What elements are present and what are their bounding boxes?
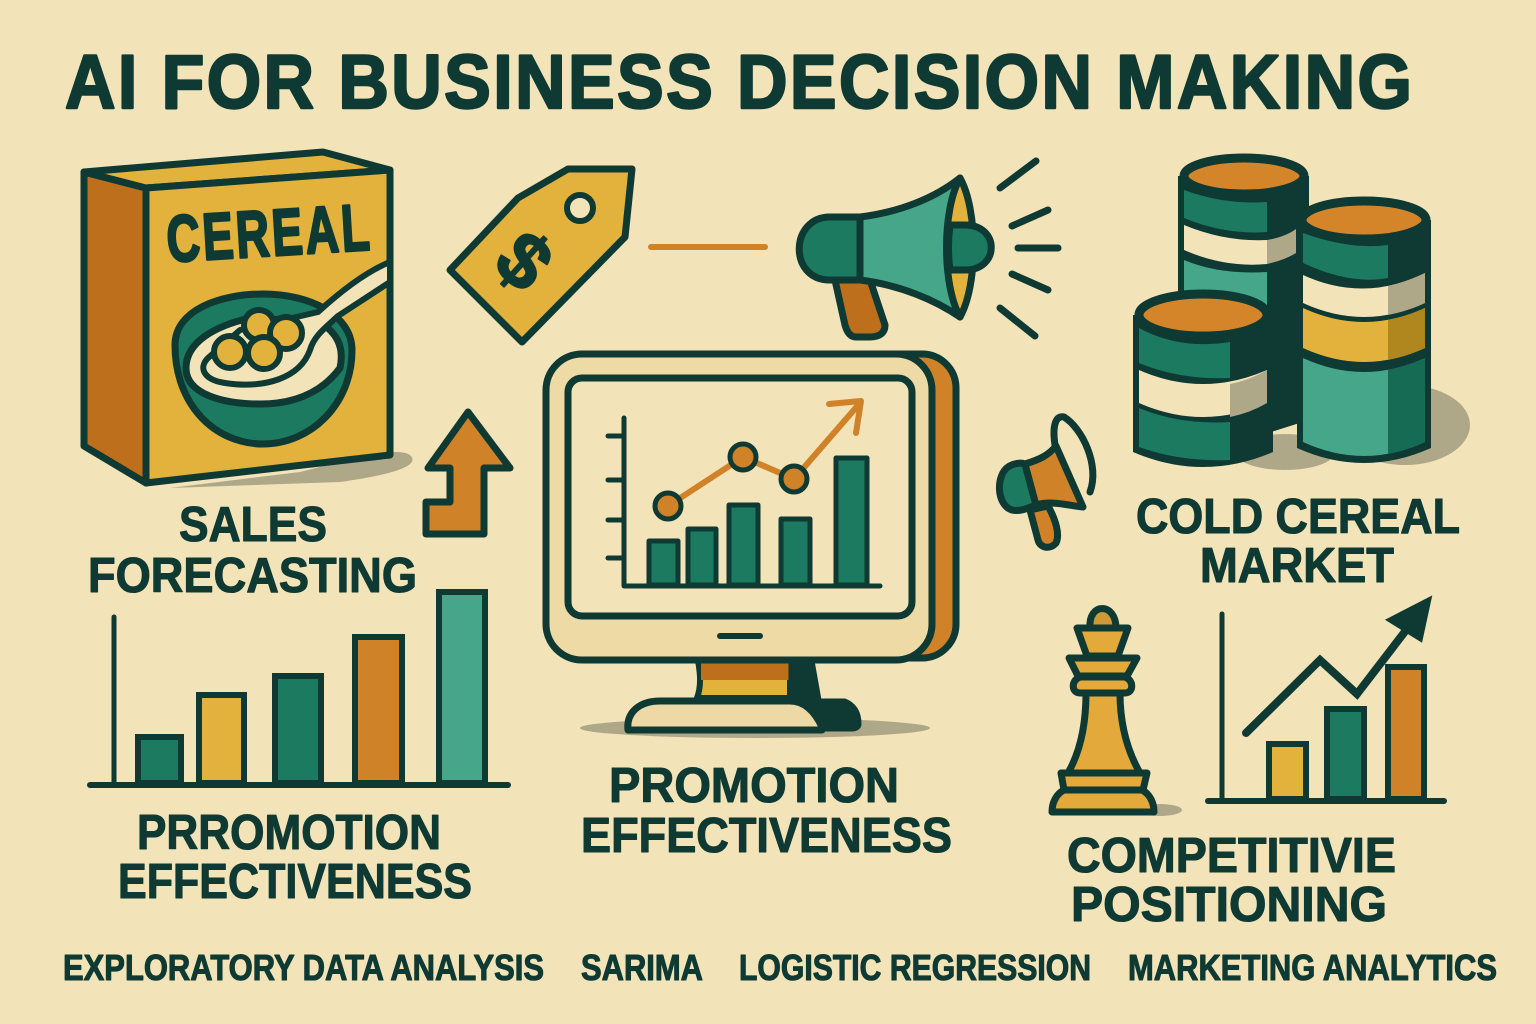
label: sales forecasting: SALES: [179, 498, 327, 552]
connector line: [651, 244, 765, 250]
bar chart: promotion: [90, 592, 508, 785]
icon: cereal bowl: [175, 262, 390, 444]
screen chart: [608, 401, 880, 586]
icon: stacked data cylinders: [1133, 158, 1470, 470]
left cylinder: [1133, 294, 1273, 467]
right cylinder: [1297, 201, 1431, 463]
label: cold cereal market: MARKET: [1200, 539, 1394, 593]
label: competitive positioning: COMPETITIVIE: [1067, 829, 1396, 883]
icon: price tag: $: [479, 214, 570, 308]
label: promotion effectiveness centre: EFFECTIVENESS: [581, 809, 952, 863]
label: sales forecasting: FORECASTING: [88, 549, 417, 603]
icon: chess king: [1052, 608, 1182, 816]
icon: price tag: [450, 169, 632, 342]
back cylinder: [1178, 158, 1309, 442]
label: prromotion effectiveness left: EFFECTIVENESS: [118, 855, 472, 909]
label: promotion effectiveness centre: [581, 759, 952, 863]
label: sales forecasting: [88, 498, 417, 603]
icon: small megaphone: [999, 417, 1093, 547]
icon: cereal box: CEREAL: [164, 191, 372, 277]
chart: competitive positioning: [1208, 601, 1444, 801]
title: AI FOR BUSINESS DECISION MAKING: [65, 40, 1412, 125]
icon: large megaphone: [799, 161, 1058, 337]
footer keywords: SARIMA: [581, 947, 703, 988]
icon: computer monitor with chart: [546, 354, 956, 738]
icon: upward arrow: [426, 412, 510, 534]
footer keywords: LOGISTIC REGRESSION: [739, 947, 1091, 988]
label: prromotion effectiveness left: PRROMOTION: [137, 806, 441, 860]
footer keywords: [63, 947, 1497, 988]
label: competitive positioning: [1067, 829, 1396, 932]
label: prromotion effectiveness left: [118, 806, 472, 909]
label: promotion effectiveness centre: PROMOTION: [609, 759, 899, 813]
label: competitive positioning: POSITIONING: [1071, 878, 1387, 932]
label: cold cereal market: COLD CEREAL: [1136, 490, 1460, 544]
footer keywords: EXPLORATORY DATA ANALYSIS: [63, 947, 544, 988]
icon: cereal box: [84, 152, 413, 488]
label: cold cereal market: [1136, 490, 1460, 593]
